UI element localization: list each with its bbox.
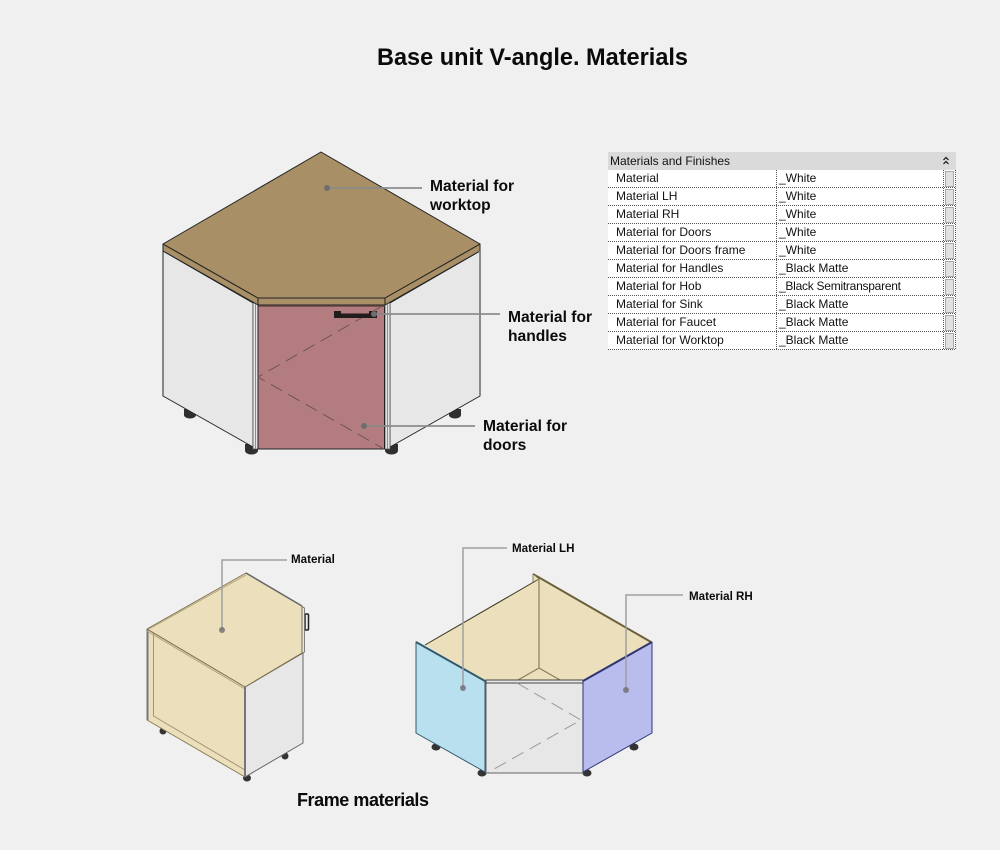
foot: back right bbox=[449, 409, 461, 419]
leader: handles bbox=[371, 311, 500, 317]
foot: front left bbox=[245, 444, 258, 454]
row values bbox=[778, 171, 902, 347]
row values: _White bbox=[778, 243, 817, 257]
row values: _Black Matte bbox=[778, 297, 849, 311]
row labels: Material for Faucet bbox=[616, 315, 717, 329]
table rows background bbox=[608, 170, 956, 350]
table header bbox=[608, 152, 956, 170]
row labels: Material LH bbox=[616, 189, 677, 203]
right side panel bbox=[390, 251, 480, 447]
row dividers bbox=[608, 170, 956, 350]
leader: worktop bbox=[324, 185, 422, 191]
foot: back left bbox=[184, 409, 196, 419]
label: doors: Material for bbox=[483, 418, 567, 435]
row values: _Black Matte bbox=[778, 315, 849, 329]
row values: _Black Semitransparent bbox=[778, 279, 902, 293]
leader: RH bbox=[623, 595, 683, 693]
door panel bbox=[258, 305, 384, 449]
back strip and handle bbox=[301, 606, 308, 654]
caption: Frame materials bbox=[297, 790, 429, 810]
label: LH: Material LH bbox=[512, 542, 574, 555]
row buttons bbox=[946, 172, 954, 348]
main cabinet illustration bbox=[163, 152, 480, 454]
row labels: Material for Hob bbox=[616, 279, 702, 293]
row values: _Black Matte bbox=[778, 261, 849, 275]
row values: _White bbox=[778, 171, 817, 185]
row labels: Material bbox=[616, 171, 659, 185]
row labels: Material for Doors bbox=[616, 225, 711, 239]
door opening dashes bbox=[258, 305, 384, 449]
materials table bbox=[608, 152, 956, 350]
feet bbox=[160, 728, 288, 782]
title: Base unit V-angle. Materials bbox=[377, 44, 688, 71]
row labels: Material RH bbox=[616, 207, 679, 221]
right edge highlight bbox=[479, 251, 481, 396]
row labels: Material for Worktop bbox=[616, 333, 724, 347]
row values: _White bbox=[778, 207, 817, 221]
label: handles: Material for bbox=[508, 309, 592, 326]
label: worktop: worktop bbox=[429, 197, 491, 214]
label: doors: doors bbox=[483, 437, 527, 454]
label: RH: Material RH bbox=[689, 590, 753, 603]
table header: Materials and Finishes bbox=[610, 154, 730, 168]
frame unit, left view bbox=[147, 573, 308, 782]
left face bbox=[147, 629, 245, 777]
worktop surface bbox=[163, 152, 480, 298]
row labels bbox=[616, 171, 746, 347]
row values: _White bbox=[778, 189, 817, 203]
right face bbox=[245, 653, 303, 777]
row labels: Material for Handles bbox=[616, 261, 723, 275]
feet bbox=[432, 744, 638, 776]
row values: _White bbox=[778, 225, 817, 239]
lavender panel RH bbox=[583, 642, 652, 772]
frame unit, right view bbox=[416, 574, 652, 776]
top rim lines bbox=[147, 575, 246, 689]
blue panel LH bbox=[416, 642, 485, 772]
middle panel bbox=[486, 680, 583, 773]
label: worktop: Material for bbox=[430, 178, 514, 195]
worktop edge bbox=[163, 244, 480, 305]
foot: front right bbox=[385, 444, 398, 454]
handle bbox=[334, 311, 377, 318]
leader: LH bbox=[460, 548, 507, 691]
label: handles: handles bbox=[508, 328, 567, 345]
row values: _Black Matte bbox=[778, 333, 849, 347]
front edge strong line bbox=[244, 687, 246, 777]
door frame strips bbox=[253, 303, 390, 449]
label: material: Material bbox=[291, 553, 335, 566]
left side panel bbox=[163, 251, 253, 447]
leader: material bbox=[219, 560, 287, 633]
row labels: Material for Sink bbox=[616, 297, 704, 311]
row labels: Material for Doors frame bbox=[616, 243, 746, 257]
inner cream back bbox=[425, 574, 651, 681]
top face bbox=[147, 573, 302, 687]
leader: doors bbox=[361, 423, 475, 429]
